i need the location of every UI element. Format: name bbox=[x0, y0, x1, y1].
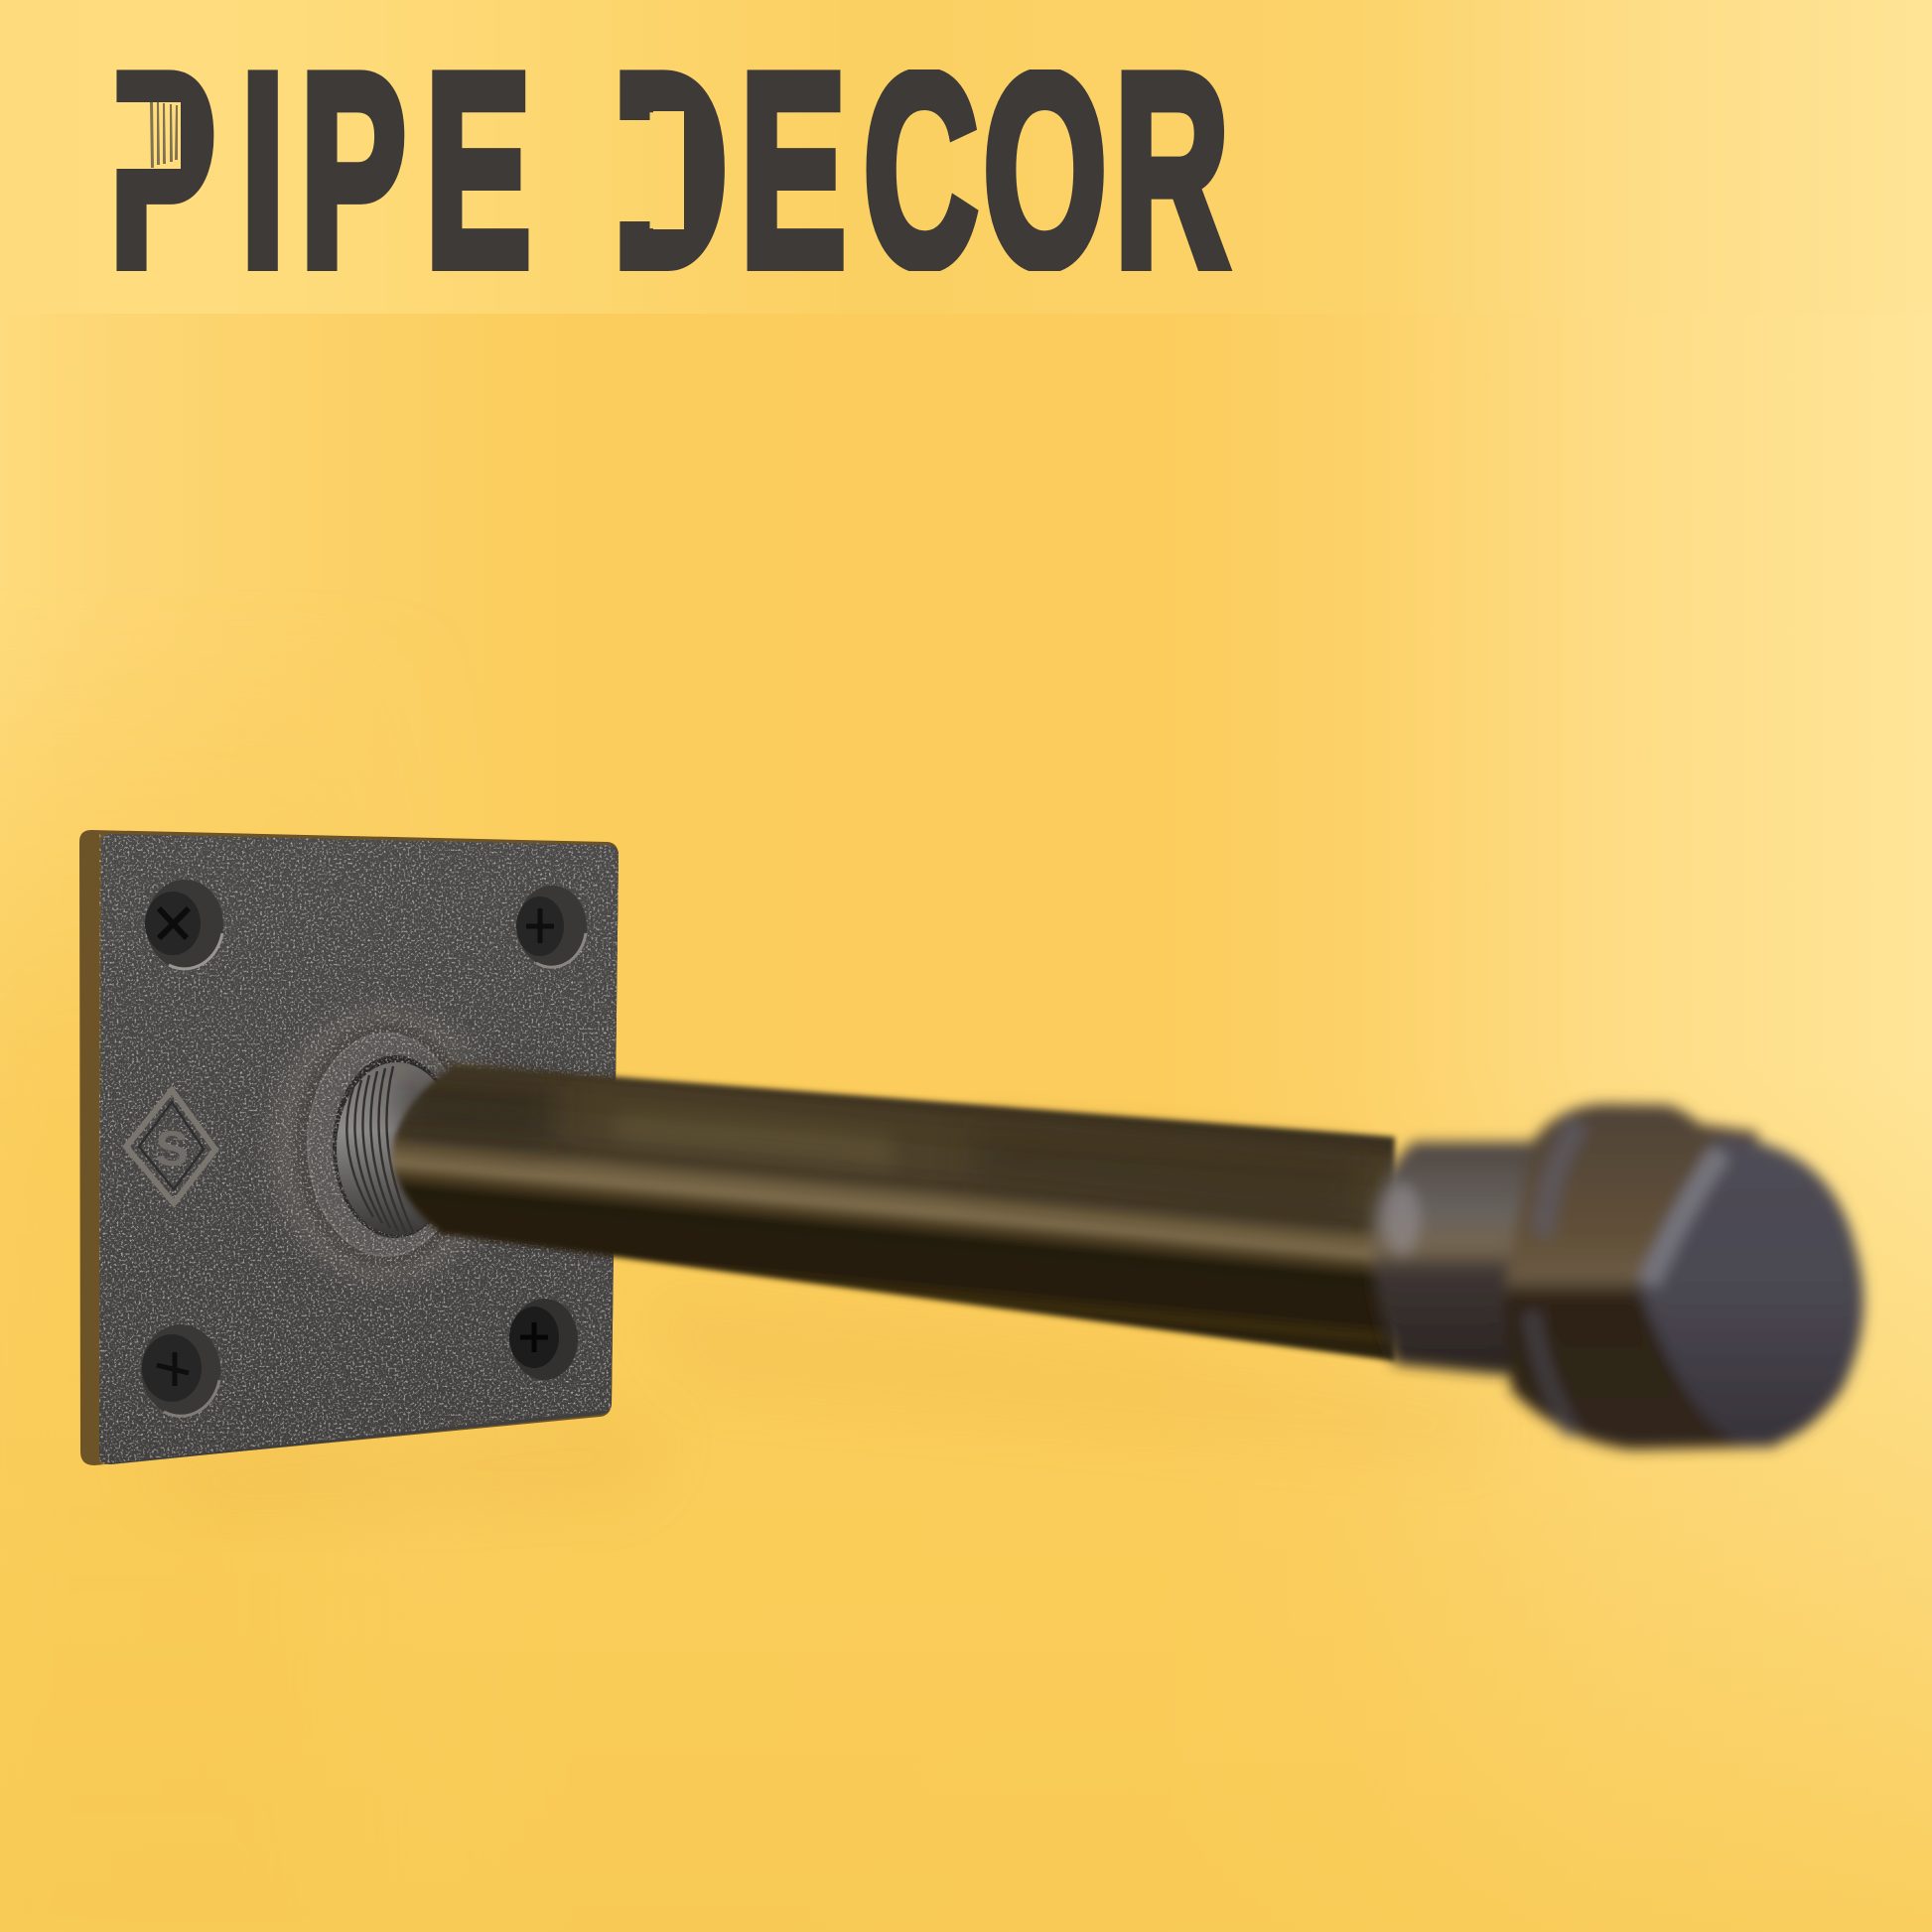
pipe shadow on wall bbox=[635, 1291, 1489, 1459]
screw bottom left bbox=[141, 1324, 220, 1416]
title band background bbox=[0, 0, 1932, 314]
plate edge bbox=[79, 830, 619, 1465]
screw bottom right bbox=[509, 1299, 578, 1380]
diamond logo mark bbox=[126, 1090, 215, 1203]
mounting plate bbox=[79, 830, 621, 1467]
title letter cut: stencil D bbox=[613, 111, 696, 229]
plate shadow on wall bbox=[119, 1410, 675, 1519]
screw top right bbox=[516, 886, 587, 967]
cap face bbox=[1638, 1137, 1863, 1447]
threaded pipe end bbox=[337, 1062, 458, 1235]
cap collar bbox=[1504, 1104, 1777, 1449]
plate casting texture bbox=[99, 832, 621, 1467]
title bbox=[116, 69, 1233, 271]
raised boss around pipe bbox=[270, 1008, 500, 1282]
pipe end cap bbox=[1371, 1104, 1863, 1449]
plate face bbox=[99, 834, 619, 1464]
title letter cut: stencil P bbox=[109, 102, 195, 169]
title: PIPE DECOR bbox=[109, 16, 1229, 324]
coupling neck bbox=[1371, 1142, 1539, 1375]
flange collar bbox=[308, 1034, 465, 1256]
pipe bbox=[393, 1064, 1395, 1361]
diamond logo mark: S bbox=[155, 1121, 189, 1176]
screw top left bbox=[145, 880, 223, 969]
